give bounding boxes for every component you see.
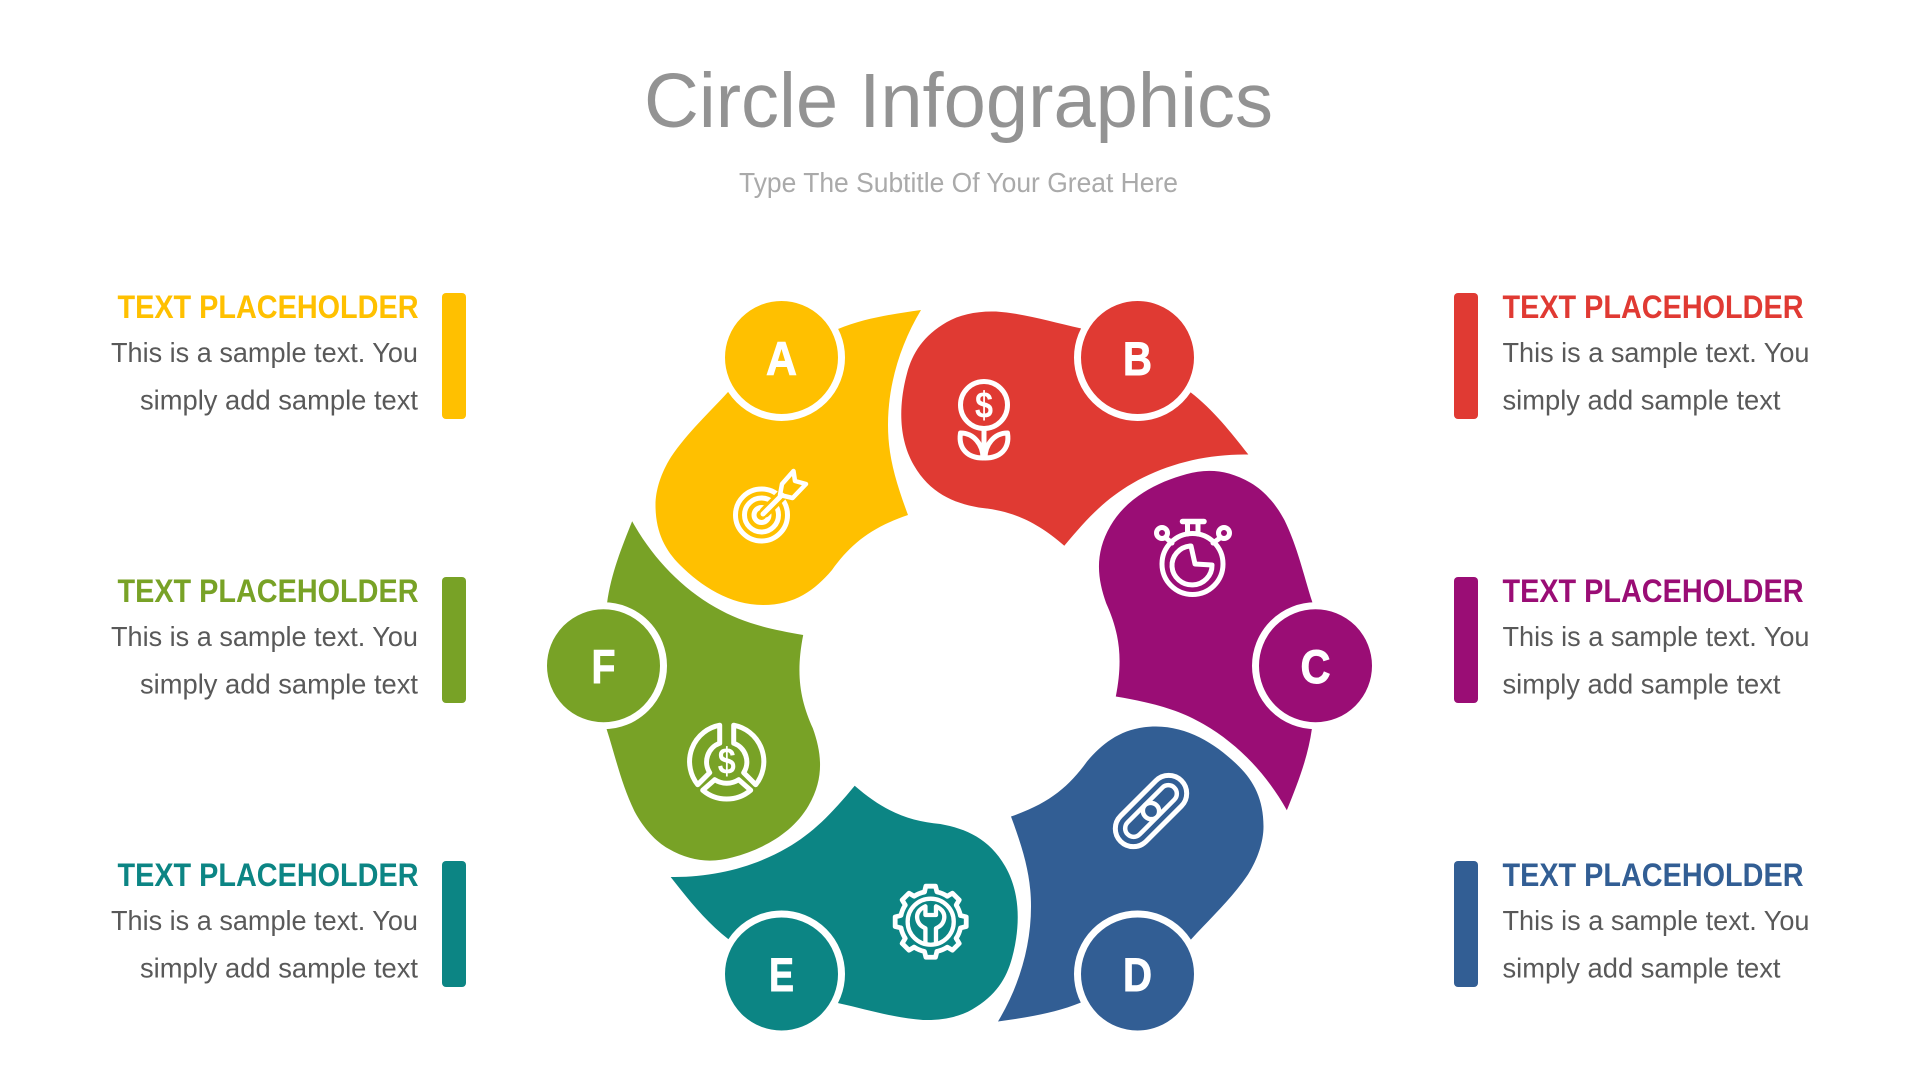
badge D: D (1123, 948, 1152, 1001)
text block B: simply add sample text (1502, 384, 1781, 416)
text block A: simply add sample text (140, 384, 418, 416)
text block A (111, 289, 466, 419)
text block F: This is a sample text. You (111, 621, 418, 652)
text block D: simply add sample text (1502, 952, 1781, 984)
badge E: E (769, 948, 794, 1001)
badge D (1078, 914, 1198, 1034)
badge C (1256, 606, 1376, 726)
petal B: red (860, 225, 1248, 602)
text block F: TEXT PLACEHOLDER (118, 573, 418, 609)
icon: target with arrow (736, 471, 806, 541)
icon: money flower (960, 382, 1008, 458)
icon: stopwatch (1156, 522, 1230, 594)
text block C: TEXT PLACEHOLDER (1502, 573, 1804, 609)
petal F: green (499, 521, 888, 899)
text block E: This is a sample text. You (111, 905, 418, 936)
text block A: This is a sample text. You (111, 337, 418, 368)
icon: money flower: $ (975, 384, 993, 426)
text block B: TEXT PLACEHOLDER (1502, 289, 1804, 325)
badge B (1078, 298, 1198, 418)
badge C: C (1300, 640, 1330, 693)
badge F (544, 606, 664, 726)
text block F: simply add sample text (140, 668, 418, 700)
petal D: blue (998, 726, 1264, 1022)
text block E: TEXT PLACEHOLDER (118, 857, 418, 893)
text block D: TEXT PLACEHOLDER (1502, 857, 1804, 893)
text block C: This is a sample text. You (1502, 621, 1810, 652)
petal C: purple (1031, 433, 1420, 810)
text block B: This is a sample text. You (1502, 337, 1810, 368)
text block A: TEXT PLACEHOLDER (118, 289, 418, 325)
text block E (111, 857, 466, 987)
badge A: A (766, 332, 797, 385)
text block F (111, 573, 466, 703)
badge F: F (592, 640, 616, 693)
icon: gear with wrench (894, 885, 968, 959)
icon: dollar donut segments: $ (718, 741, 736, 782)
petal E: teal (671, 729, 1059, 1080)
text block D: This is a sample text. You (1502, 905, 1810, 936)
text block C (1454, 573, 1810, 703)
subtitle: Type The Subtitle Of Your Great Here (739, 167, 1178, 198)
title: Circle Infographics (644, 58, 1273, 144)
badge E (722, 914, 842, 1034)
badge A (722, 298, 842, 418)
text block B (1454, 289, 1810, 419)
text block D (1454, 857, 1810, 987)
text block E: simply add sample text (140, 952, 418, 984)
text block C: simply add sample text (1502, 668, 1781, 700)
icon: dollar donut segments (690, 725, 764, 799)
badge B: B (1123, 332, 1152, 385)
icon: chain link (1108, 768, 1194, 854)
petal A: yellow (656, 310, 921, 605)
